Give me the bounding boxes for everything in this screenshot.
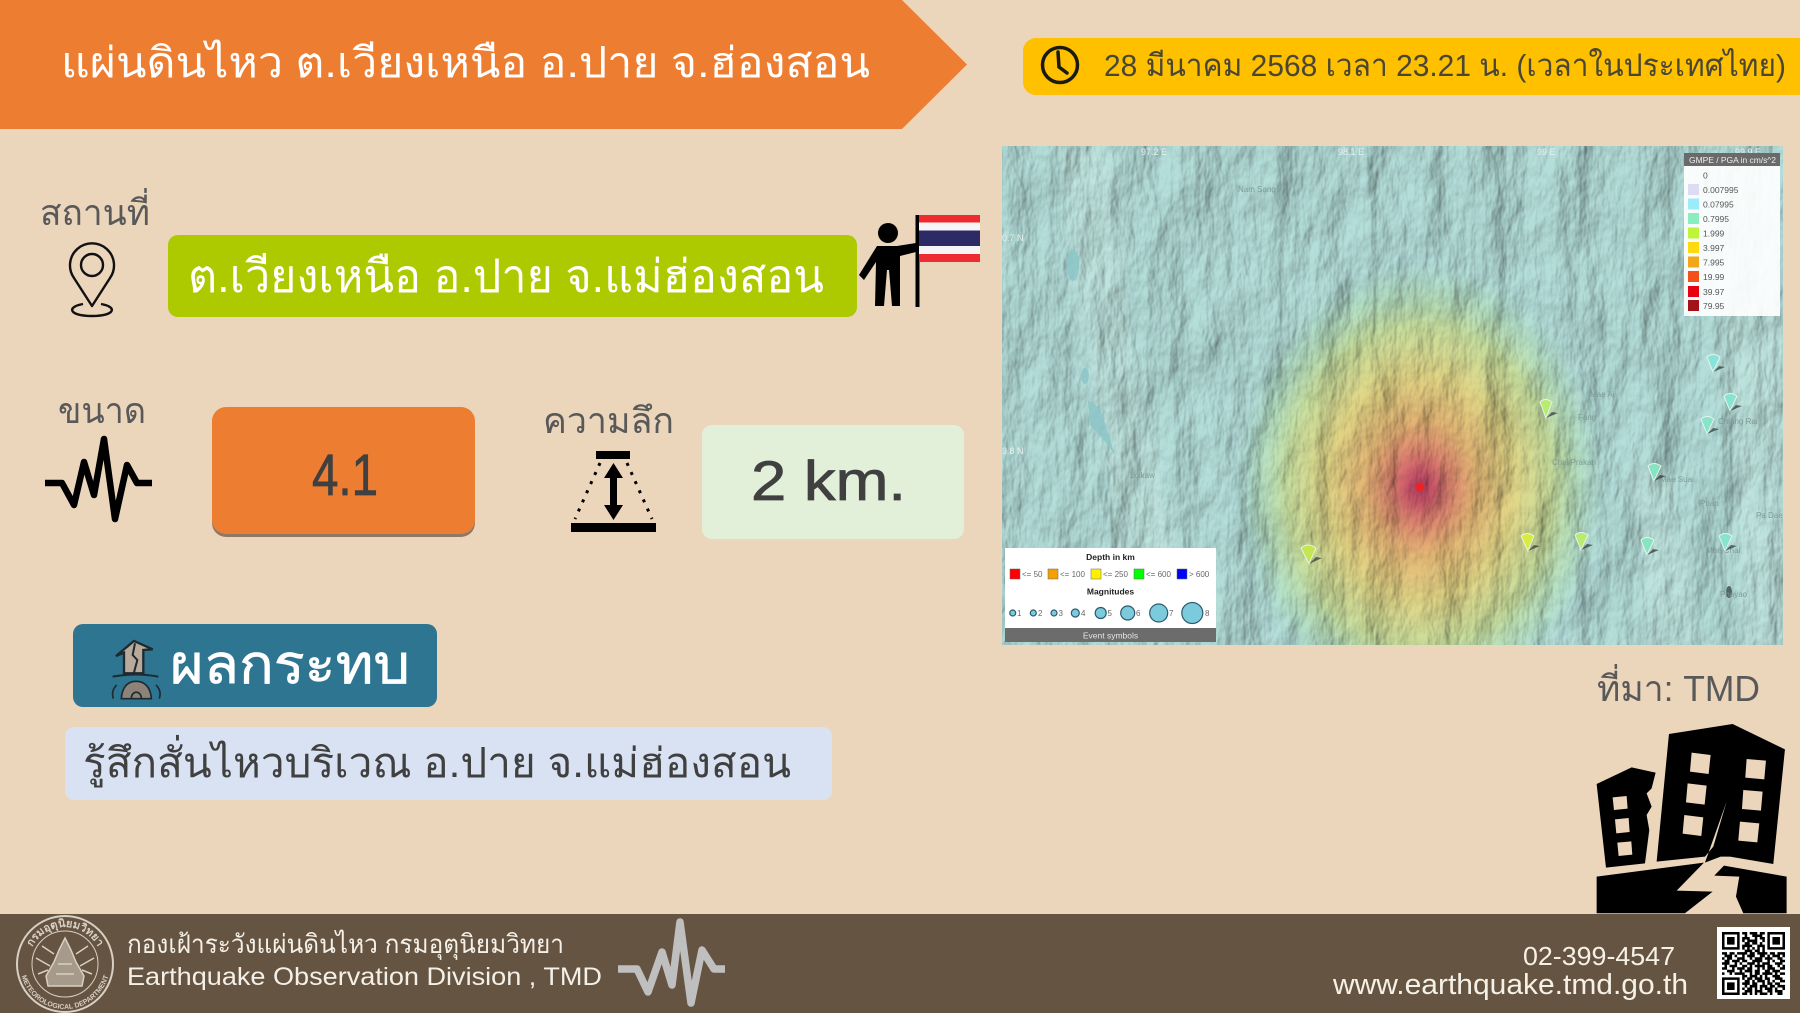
footer text: division name: [127, 929, 602, 991]
map legend: event symbols: 4: [1081, 609, 1086, 618]
icon: cracked house: [113, 641, 160, 699]
heading: depth: ความลึก: [543, 400, 674, 441]
map labels: 97.2 E: [1141, 147, 1167, 157]
map legend: event symbols: <= 250: [1103, 570, 1128, 579]
map labels: [1002, 147, 1761, 456]
date and time bar: 28 มีนาคม 2568 เวลา 23.21 น. (เวลาในประเทศไทย): [1104, 48, 1786, 83]
map markers: recording stations: [1301, 354, 1742, 564]
map labels: 99.9 E: [1735, 147, 1761, 157]
map legend: ground motion scale: 7.995: [1703, 258, 1725, 268]
map: ground-motion shake map: Nam Sang: [1238, 185, 1276, 194]
map: ground-motion shake map: Loikaw: [1130, 471, 1155, 480]
map: ground-motion shake map: Mae Suai: [1660, 475, 1694, 484]
map legend: event symbols: [1005, 548, 1216, 642]
map legend: event symbols: > 600: [1189, 570, 1210, 579]
map legend: event symbols: <= 50: [1022, 570, 1043, 579]
map: ground-motion shake map: [1002, 146, 1783, 645]
map: ground-motion shake map: Phayao: [1720, 590, 1748, 599]
title banner: แผ่นดินไหว ต.เวียงเหนือ อ.ปาย จ.ฮ่องสอน: [61, 39, 870, 86]
map legend: ground motion scale: 0.07995: [1703, 200, 1734, 210]
map labels: 9.8 N: [1002, 446, 1024, 456]
depth box: 2 km.: [751, 449, 906, 512]
icon: collapsing buildings: [1597, 724, 1787, 913]
heading: magnitude: ขนาด: [58, 390, 146, 431]
emblem: department seal: METEOROLOGICAL DEPARTMENT: [22, 974, 108, 1009]
footer band: [0, 914, 1800, 1013]
map: ground-motion shake map: Mae Chai: [1706, 546, 1740, 555]
map features: valley plains: [1060, 146, 1783, 645]
QR code: [1717, 927, 1790, 999]
map legend: event symbols: Depth in km: [1086, 552, 1135, 562]
map legend: ground motion scale: 79.95: [1703, 301, 1725, 311]
magnitude box: [212, 407, 475, 537]
map: ground-motion shake map: Phan: [1700, 499, 1719, 508]
map labels: 99 E: [1537, 147, 1556, 157]
icon: clock: [1042, 48, 1078, 82]
emblem: department seal: [16, 915, 114, 1013]
map legend: ground motion scale: 0.007995: [1703, 185, 1739, 195]
map legend: event symbols: 2: [1038, 609, 1043, 618]
location box: ต.เวียงเหนือ อ.ปาย จ.แม่ฮ่องสอน: [188, 250, 824, 302]
map: ground-motion shake map: Mae Ai: [1590, 390, 1615, 399]
map legend: ground motion scale: 0: [1703, 170, 1708, 180]
location box: [168, 235, 857, 317]
title banner: [0, 0, 967, 129]
map: ground-motion shake map: Fang: [1578, 413, 1596, 422]
map legend: event symbols: 3: [1058, 609, 1064, 618]
map legend: event symbols: 5: [1108, 609, 1112, 618]
map legend: ground motion scale: GMPE / PGA in cm/s^2: [1689, 155, 1776, 165]
map legend: ground motion scale: 39.97: [1703, 287, 1725, 297]
impact description box: [65, 727, 832, 800]
map legend: event symbols: 7: [1169, 609, 1174, 618]
depth box: [702, 425, 964, 539]
footer text: contact: 02-399-4547: [1523, 941, 1675, 971]
map: ground-motion shake map: Chiang Rai: [1718, 417, 1758, 426]
map legend: ground motion scale: 1.999: [1703, 228, 1725, 238]
footer text: division name: กองเฝ้าระวังแผ่นดินไหว กรมอุตุนิยมวิทยา: [127, 929, 564, 960]
map legend: ground motion scale: 19.99: [1703, 272, 1725, 282]
map features: lakes: [1067, 249, 1732, 598]
map marker: epicentre: [1416, 482, 1424, 492]
map legend: event symbols: 1: [1017, 609, 1022, 618]
icon: person with Thai flag: [859, 215, 980, 307]
map labels: 98.1 E: [1338, 147, 1364, 157]
map labels: 0.7 N: [1002, 233, 1024, 243]
heading: impact: [73, 624, 437, 707]
date and time bar: [1023, 38, 1800, 95]
icon: depth: [571, 451, 656, 532]
map legend: event symbols: 8: [1205, 609, 1210, 618]
footer text: division name: Earthquake Observation Division , TMD: [127, 963, 602, 991]
heading: location: สถานที่: [40, 188, 150, 233]
icon: map pin: [70, 243, 114, 316]
map: ground-motion shake map: Pa Daet: [1756, 511, 1786, 520]
map legend: event symbols: <= 100: [1060, 570, 1085, 579]
map legend: ground motion scale: 0.7995: [1703, 214, 1729, 224]
icon: footer seismic wave: [618, 922, 725, 1003]
footer text: contact: www.earthquake.tmd.go.th: [1332, 969, 1688, 1001]
icon: seismic wave: [45, 439, 152, 519]
map legend: event symbols: Event symbols: [1083, 630, 1138, 640]
map legend: ground motion scale: [1684, 153, 1780, 316]
source credit: ที่มา: TMD: [1597, 664, 1760, 709]
impact description box: รู้สึกสั่นไหวบริเวณ อ.ปาย จ.แม่ฮ่องสอน: [83, 735, 791, 788]
map legend: event symbols: <= 600: [1146, 570, 1171, 579]
emblem: department seal: กรมอุตุนิยมวิทยา: [28, 918, 102, 946]
map legend: ground motion scale: 3.997: [1703, 243, 1725, 253]
footer text: contact: [1332, 941, 1688, 1001]
map: ground-motion shake map: Chai Prakan: [1552, 458, 1596, 467]
magnitude box: 4.1: [312, 443, 378, 508]
map legend: event symbols: Magnitudes: [1087, 586, 1134, 596]
map legend: event symbols: 6: [1136, 609, 1141, 618]
heading: impact: ผลกระทบ: [170, 635, 410, 695]
